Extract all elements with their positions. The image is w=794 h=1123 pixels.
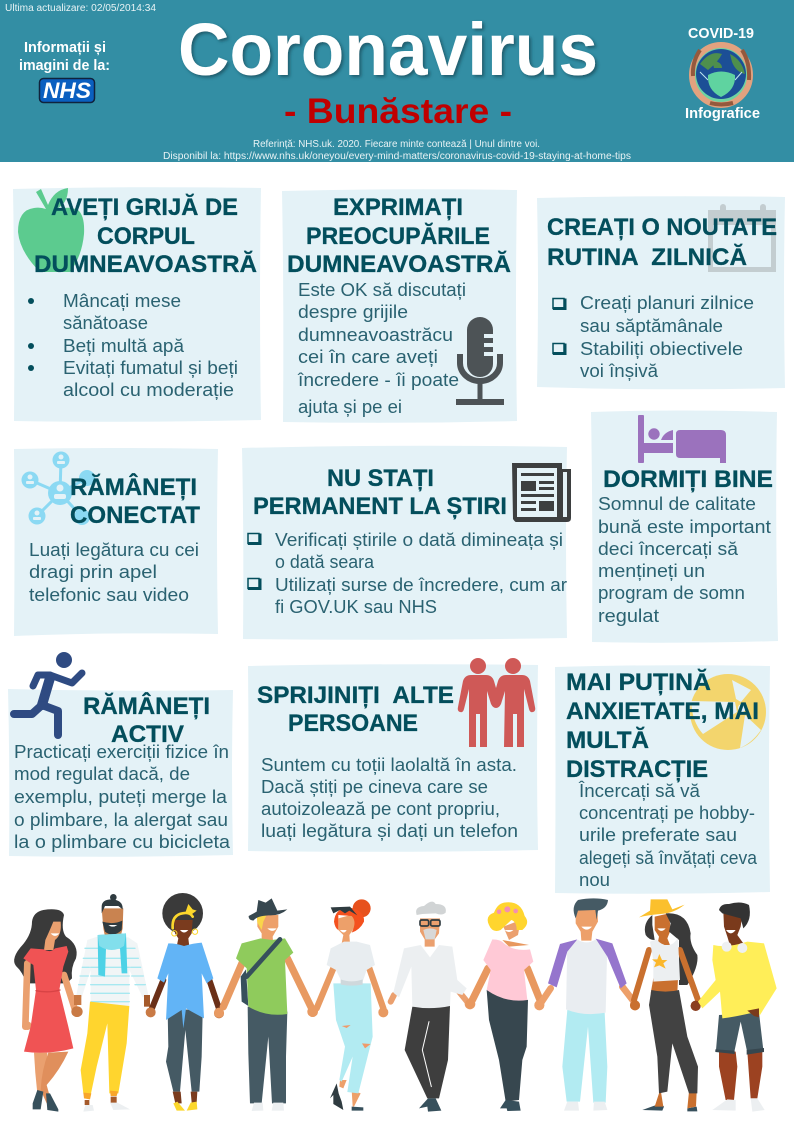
body text: luați legătura și dați un telefon — [261, 821, 518, 841]
body text: mențineți un — [598, 561, 705, 581]
body text: regulat — [598, 606, 659, 626]
bullet list: Evitați fumatul și beți — [63, 358, 238, 378]
body text: Încercați să vă — [578, 781, 701, 801]
body text: o plimbare, la alergat sau — [14, 810, 228, 830]
body text: exemplu, puteți merge la — [14, 787, 228, 807]
source label: imagini de la: — [19, 57, 110, 74]
body text: ajuta și pe ei — [298, 397, 402, 417]
person: woman in red dress — [14, 909, 82, 1112]
heading: CREAȚI O NOUTATE — [547, 214, 777, 241]
panel: express concerns — [282, 189, 517, 423]
icon: beach ball — [690, 674, 766, 750]
body text — [261, 755, 518, 841]
reference text: Disponibil la: https://www.nhs.uk/oneyou/every-mind-matters/coronavirus-covid-19-staying-at-home-tips — [163, 151, 631, 162]
icon: runner — [14, 652, 82, 735]
heading — [253, 465, 507, 520]
bullet list: Mâncați mese — [63, 291, 181, 311]
bullet list: alcool cu moderație — [63, 380, 234, 400]
body text: Somnul de calitate — [598, 494, 756, 514]
bullet list — [28, 291, 238, 400]
body text: Este OK să discutați — [298, 280, 466, 300]
last updated text: Ultima actualizare: 02/05/2014:34 — [5, 3, 156, 14]
body text — [14, 742, 231, 852]
checklist: o dată seara — [275, 552, 375, 572]
body text: urile preferate sau — [579, 825, 737, 845]
heading: MULTĂ — [566, 726, 649, 754]
body text: la o plimbare cu bicicleta — [14, 832, 231, 852]
heading: CONECTAT — [70, 502, 200, 529]
icon: globe with mask — [690, 44, 752, 106]
reference text: Referință: NHS.uk. 2020. Fiecare minte contează | Unul dintre voi. — [253, 139, 540, 150]
heading: EXPRIMAȚI — [333, 194, 463, 221]
icon: network — [22, 452, 95, 525]
icon: microphone — [456, 317, 504, 405]
body text: nou — [579, 870, 610, 890]
body text: dragi prin apel — [29, 562, 157, 582]
header banner — [0, 0, 794, 162]
body text — [297, 280, 466, 417]
heading: ACTIV — [111, 721, 184, 748]
heading — [257, 682, 454, 737]
title: Coronavirus — [178, 8, 598, 91]
person: man in purple sleeves — [534, 898, 640, 1111]
heading — [547, 214, 777, 271]
heading — [566, 668, 759, 783]
heading: AVEȚI GRIJĂ DE — [51, 193, 238, 221]
checklist — [553, 293, 754, 381]
heading — [70, 473, 200, 529]
body text — [598, 494, 771, 626]
heading: SPRIJINIȚI ALTE — [257, 682, 454, 709]
heading: PREOCUPĂRILE — [306, 222, 490, 250]
bullet list: sănătoase — [63, 313, 148, 333]
panel: daily routine — [537, 196, 785, 389]
panel: body care — [13, 187, 261, 422]
heading: DORMIȚI BINE — [603, 466, 773, 493]
person: woman with afro — [146, 893, 224, 1111]
body text: mod regulat dacă, de — [14, 764, 190, 784]
heading: RĂMÂNEȚI — [83, 692, 210, 720]
checklist: Stabiliți obiectivele — [580, 339, 743, 359]
icon: NHS logo: NHS — [43, 78, 91, 103]
body text — [29, 540, 199, 605]
heading: DUMNEAVOASTRĂ — [287, 250, 511, 278]
bullet list: Beți multă apă — [63, 336, 185, 356]
icon: bed — [638, 415, 726, 463]
body text: deci încercați să — [598, 539, 739, 559]
panel: news — [242, 446, 571, 640]
heading: PERSOANE — [288, 710, 418, 737]
body text: Suntem cu toții laolaltă în asta. — [261, 755, 517, 775]
person: woman with flower crown — [465, 902, 544, 1111]
heading: MAI PUȚINĂ — [566, 668, 711, 696]
people holding hands illustration — [14, 893, 777, 1112]
body text: autoizolează pe cont propriu, — [261, 799, 500, 819]
checklist: voi înșivă — [580, 361, 659, 381]
subtitle: - Bunăstare - — [284, 92, 512, 131]
Infografice label: Infografice — [685, 105, 760, 122]
person: bearded man — [72, 894, 150, 1112]
body text: despre grijile — [298, 302, 408, 322]
body text: alegeți să învățați ceva — [579, 848, 758, 868]
body text: Practicați exerciții fizice în — [14, 742, 229, 762]
heading — [83, 692, 210, 748]
body text: dumneavoastrăcu — [298, 325, 453, 345]
source label — [19, 39, 110, 74]
body text: Luați legătura cu cei — [29, 540, 199, 560]
body text: bună este important — [598, 517, 771, 537]
icon: newspaper — [512, 463, 571, 522]
body text: program de somn — [598, 583, 745, 603]
panel: stay connected — [14, 448, 218, 636]
panel: sleep well — [591, 410, 778, 643]
checklist: sau săptămânale — [580, 316, 723, 336]
panel: less anxiety — [555, 665, 770, 894]
person: woman with red hair — [308, 899, 388, 1111]
heading: ANXIETATE, MAI — [566, 698, 759, 725]
source label: Informații și — [24, 39, 106, 56]
checklist: Utilizați surse de încredere, cum ar — [275, 575, 567, 595]
person: woman in yellow hat — [630, 899, 701, 1111]
reference text — [163, 139, 631, 162]
heading: DISTRACȚIE — [566, 756, 708, 783]
body text: cei în care aveți — [298, 347, 438, 367]
icon: two people — [458, 658, 535, 747]
heading: PERMANENT LA ȘTIRI — [253, 493, 507, 520]
panel: stay active — [8, 652, 233, 857]
heading: RĂMÂNEȚI — [70, 473, 197, 501]
heading: NU STAȚI — [327, 465, 434, 492]
heading: RUTINA ZILNICĂ — [547, 243, 747, 271]
heading: CORPUL — [97, 223, 195, 250]
heading: DUMNEAVOASTRĂ — [34, 250, 257, 278]
checklist: Verificați știrile o dată dimineața și — [275, 530, 563, 550]
checklist — [248, 530, 567, 617]
person: man in hat — [214, 898, 318, 1111]
heading — [34, 193, 257, 278]
body text — [578, 781, 758, 890]
panel: support others — [248, 658, 538, 852]
heading — [287, 194, 511, 278]
icon: calendar — [708, 204, 776, 272]
body text: încredere - îi poate — [297, 370, 459, 390]
person: man in yellow sweater — [691, 903, 777, 1112]
checklist: fi GOV.UK sau NHS — [275, 597, 437, 617]
person: older man with glasses — [391, 902, 475, 1112]
COVID-19 label: COVID-19 — [688, 25, 754, 42]
checklist: Creați planuri zilnice — [580, 293, 754, 313]
icon: apple — [18, 188, 84, 272]
body text: concentrați pe hobby- — [579, 803, 755, 823]
body text: telefonic sau video — [29, 585, 189, 605]
body text: Dacă știți pe cineva care se — [261, 777, 488, 797]
